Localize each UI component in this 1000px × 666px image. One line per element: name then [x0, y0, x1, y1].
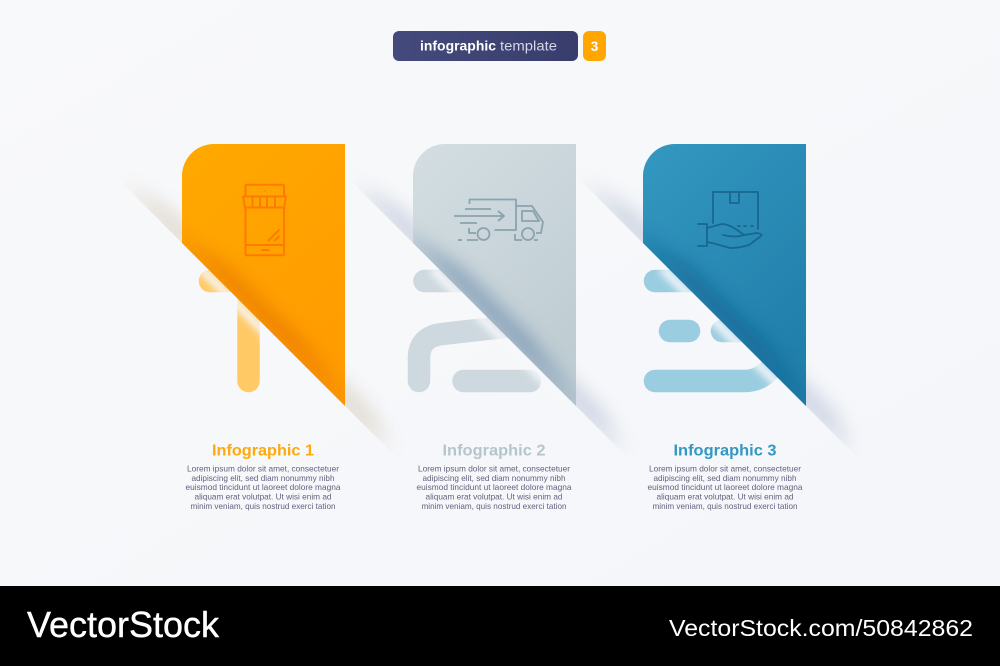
body text 3 [648, 464, 803, 511]
body text 3: minim veniam, quis nostrud exerci tation [652, 501, 798, 511]
body text 2: euismod tincidunt ut laoreet dolore magna [416, 482, 572, 492]
icon: mobile shop [243, 185, 286, 255]
panel: infographic 3 [583, 144, 853, 511]
card 3 [643, 144, 806, 406]
body text 3: euismod tincidunt ut laoreet dolore magna [648, 482, 803, 492]
body text 2 [416, 464, 572, 511]
heading 1: Infographic 1 [212, 442, 314, 460]
title pill [393, 31, 578, 61]
card 1 [182, 144, 345, 406]
number badge: 3 [591, 39, 599, 54]
body text 1: adipiscing elit, sed diam nonummy nibh [192, 473, 335, 483]
body text 3: aliquam erat volutpat. Ut wisi enim ad [656, 492, 794, 502]
body text 1: euismod tincidunt ut laoreet dolore magna [186, 482, 341, 492]
body text 2: adipiscing elit, sed diam nonummy nibh [422, 473, 566, 483]
title pill: infographic [420, 38, 497, 54]
footer bar [0, 586, 1000, 666]
icon: hand holding box [698, 192, 762, 248]
connector bars 1 [198, 270, 260, 392]
body text 2: Lorem ipsum dolor sit amet, consectetuer [418, 464, 570, 474]
footer url: VectorStock.com/50842862 [669, 615, 973, 641]
body text 1 [186, 464, 341, 511]
connector bars 3 [655, 281, 790, 381]
panel: infographic 2 [353, 144, 623, 511]
body text 3: adipiscing elit, sed diam nonummy nibh [654, 473, 797, 483]
number badge [583, 31, 606, 61]
body text 3: Lorem ipsum dolor sit amet, consectetuer [649, 464, 801, 474]
body text 1: Lorem ipsum dolor sit amet, consectetuer [187, 464, 339, 474]
body text 1: aliquam erat volutpat. Ut wisi enim ad [194, 492, 332, 502]
panel: infographic 1 [122, 144, 392, 511]
title pill: template [500, 38, 557, 54]
heading 3: Infographic 3 [674, 442, 777, 460]
body text 2: minim veniam, quis nostrud exerci tation [422, 501, 567, 511]
card 2 [413, 144, 576, 406]
icon: delivery truck [454, 200, 543, 240]
body text 2: aliquam erat volutpat. Ut wisi enim ad [426, 492, 563, 502]
connector bars 2 [419, 281, 530, 381]
body text 1: minim veniam, quis nostrud exerci tation [190, 501, 336, 511]
heading 2: Infographic 2 [442, 442, 546, 460]
footer logo: VectorStock [27, 604, 220, 645]
